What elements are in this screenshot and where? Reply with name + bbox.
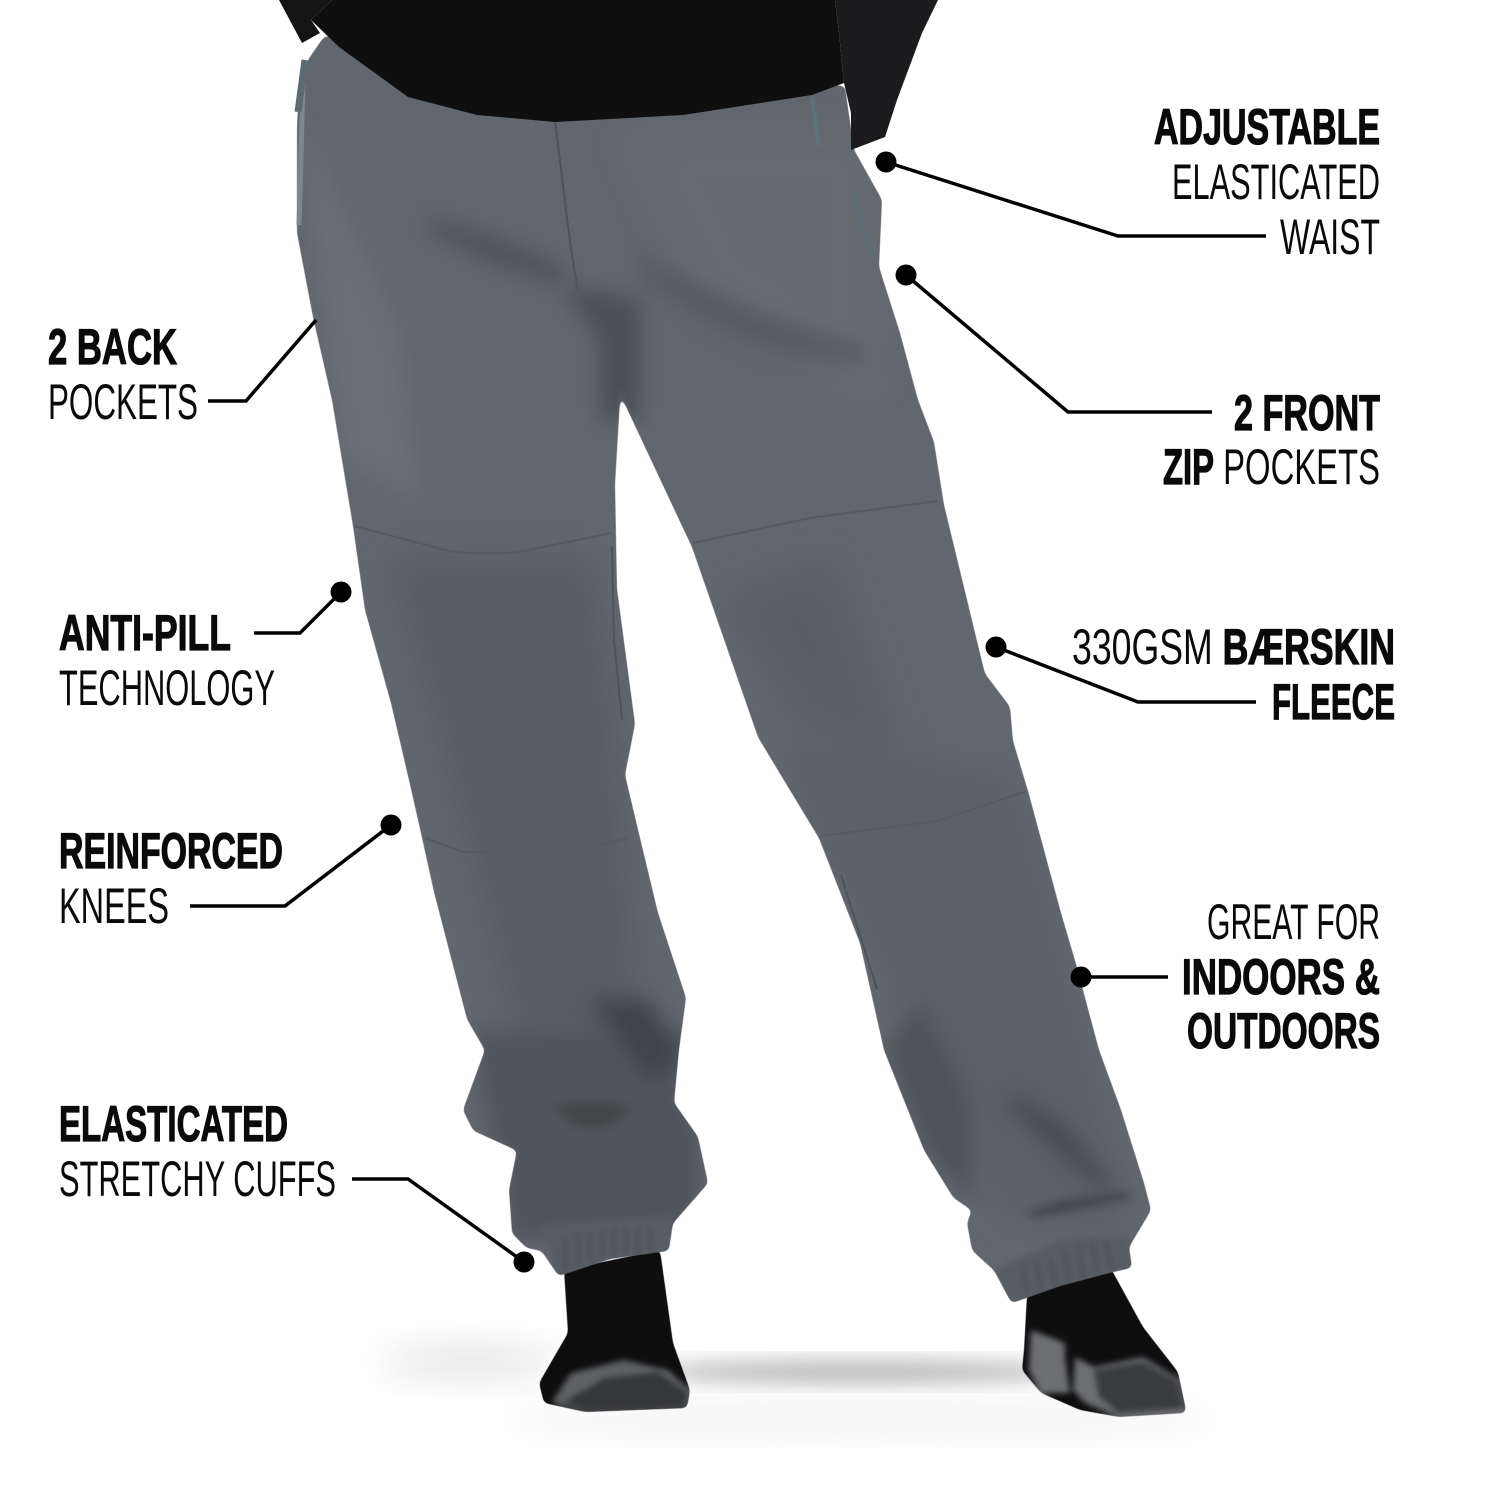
- callout: 330gsm baerskin fleece: FLEECE: [1272, 674, 1395, 730]
- callout: reinforced knees: REINFORCED: [59, 823, 283, 879]
- photo: right sock: [1022, 1265, 1186, 1417]
- photo: fleece pants: [298, 37, 1150, 1305]
- callout: elasticated stretchy cuffs: STRETCHY CUFFS: [59, 1151, 336, 1207]
- photo: black top: [279, 0, 938, 150]
- left cuff ribs: [553, 1242, 656, 1274]
- callout: great for indoors and outdoors: OUTDOORS: [1187, 1003, 1380, 1059]
- right cuff ribs: [996, 1238, 1131, 1302]
- callout: adjustable elasticated waist: [876, 99, 1380, 265]
- callout: anti-pill technology: ANTI-PILL: [59, 605, 231, 661]
- callout: great for indoors and outdoors: GREAT FOR: [1207, 894, 1380, 950]
- callout: 330gsm baerskin fleece: 330GSM BÆRSKIN: [1072, 619, 1395, 675]
- callout: elasticated stretchy cuffs: ELASTICATED: [59, 1096, 288, 1152]
- callout: adjustable elasticated waist: ELASTICATED: [1172, 154, 1380, 210]
- callout: anti-pill technology: [59, 582, 352, 716]
- callout: great for indoors and outdoors: [1070, 894, 1380, 1059]
- callout: 2 back pockets: 2 BACK: [48, 319, 177, 375]
- callout: elasticated stretchy cuffs: [59, 1096, 534, 1272]
- callout: 2 front zip pockets: [896, 264, 1380, 495]
- callout: anti-pill technology: TECHNOLOGY: [59, 660, 275, 716]
- callout: great for indoors and outdoors: INDOORS &: [1182, 949, 1380, 1005]
- callout: 2 back pockets: [48, 319, 316, 430]
- callout: 2 back pockets: POCKETS: [48, 374, 198, 430]
- photo: left sock: [539, 1250, 690, 1412]
- callout: 330gsm baerskin fleece: [986, 619, 1395, 730]
- callout: adjustable elasticated waist: WAIST: [1280, 209, 1380, 265]
- callout: 2 front zip pockets: 2 FRONT: [1234, 385, 1380, 441]
- shading on the pants: [300, 120, 1135, 1305]
- callout: reinforced knees: KNEES: [59, 878, 169, 934]
- floor shadow: [380, 1346, 1220, 1432]
- photo: pants seams and zips: [298, 60, 1027, 989]
- callout: reinforced knees: [59, 814, 402, 934]
- callout: 2 front zip pockets: ZIP POCKETS: [1163, 439, 1380, 495]
- callout: adjustable elasticated waist: ADJUSTABLE: [1154, 99, 1380, 155]
